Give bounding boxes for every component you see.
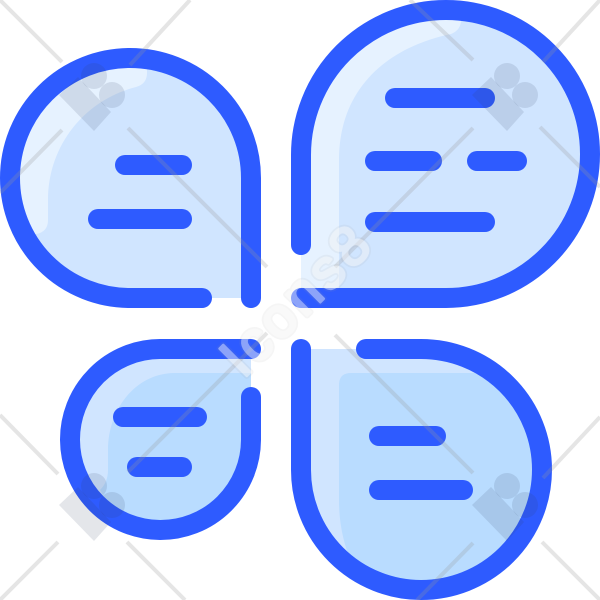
bubble fill: [311, 349, 532, 580]
text lines: [123, 417, 197, 467]
panel: bottom-left bubble: [60, 339, 260, 540]
watermark: Icons8 text: Icons8: [207, 210, 385, 388]
text lines: [379, 436, 463, 490]
bubble fill: [301, 20, 580, 288]
panel: top-left bubble: [0, 40, 251, 298]
panel: bottom-right bubble: [291, 339, 560, 600]
watermark: logo bottom-right: [472, 473, 538, 541]
watermark: logo top-right: [472, 63, 538, 131]
bubble outline: [70, 349, 251, 530]
watermark: logo top-left: [59, 63, 125, 131]
text lines: [375, 98, 517, 222]
watermark: Icons8 text: Icons8: [207, 210, 385, 388]
watermark: logo bottom-left: [59, 473, 125, 541]
bubble fill: [80, 359, 251, 520]
bubble fill: [20, 68, 241, 298]
bubble outline: [301, 349, 542, 590]
bubble outline: [301, 10, 590, 298]
text lines: [98, 165, 182, 219]
panel: top-right bubble: [291, 0, 600, 300]
bubble outline: [10, 58, 251, 298]
